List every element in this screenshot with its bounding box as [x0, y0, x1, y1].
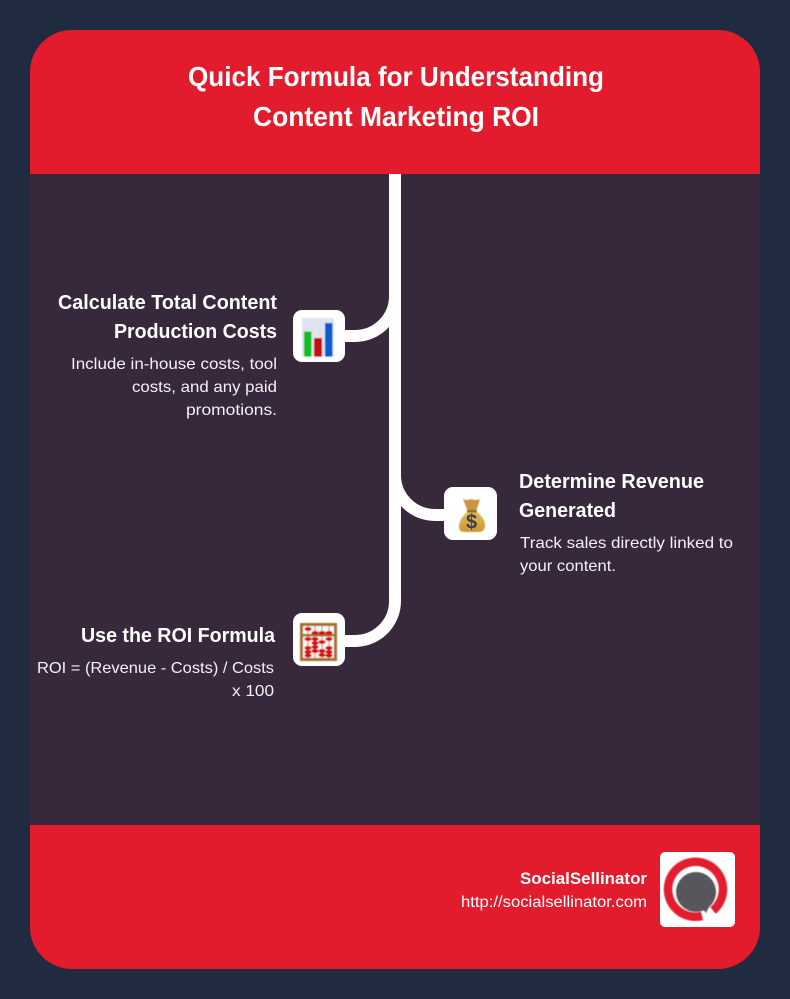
- title: [188, 61, 604, 132]
- heading: use the ROI formula: Use the ROI Formula: [81, 625, 276, 647]
- title: Content Marketing ROI: [253, 101, 539, 132]
- footer brand text: [461, 869, 647, 911]
- icon: money bag: [444, 487, 497, 540]
- text: revenue description: your content.: [520, 558, 616, 575]
- step 3: ROI formula: [37, 613, 345, 700]
- panel: footer: [30, 825, 760, 969]
- icon: money bag: $: [466, 512, 477, 534]
- step 1: calculate costs: [58, 292, 345, 419]
- timeline connector lines: [340, 174, 450, 641]
- icon: abacus: [293, 613, 345, 666]
- text: cost description: costs, and any paid: [132, 379, 277, 396]
- footer brand text: http://socialsellinator.com: [461, 894, 647, 911]
- icon: bar chart: [293, 310, 345, 362]
- heading: determine revenue generated: Generated: [519, 500, 616, 522]
- panel: body: [30, 174, 760, 825]
- text: revenue description: Track sales directly linked to: [520, 535, 733, 552]
- heading: calculate total content production costs: [58, 292, 277, 343]
- icon: SocialSellinator logo: [660, 852, 735, 927]
- footer brand text: SocialSellinator: [520, 869, 647, 888]
- heading: calculate total content production costs: Calculate Total Content: [58, 292, 277, 314]
- text: revenue description: [520, 535, 733, 575]
- text: cost description: [71, 356, 277, 419]
- heading: determine revenue generated: [519, 471, 704, 522]
- heading: calculate total content production costs: Production Costs: [114, 321, 277, 343]
- text: formula description: x 100: [232, 683, 274, 700]
- step 2: determine revenue: [444, 471, 733, 575]
- text: cost description: Include in-house costs, tool: [71, 356, 277, 373]
- title: Quick Formula for Understanding: [188, 61, 604, 92]
- text: cost description: promotions.: [186, 402, 277, 419]
- panel: header: [30, 30, 760, 174]
- heading: determine revenue generated: Determine Revenue: [519, 471, 704, 493]
- text: formula description: ROI = (Revenue - Costs) / Costs: [37, 660, 274, 677]
- text: formula description: [37, 660, 274, 700]
